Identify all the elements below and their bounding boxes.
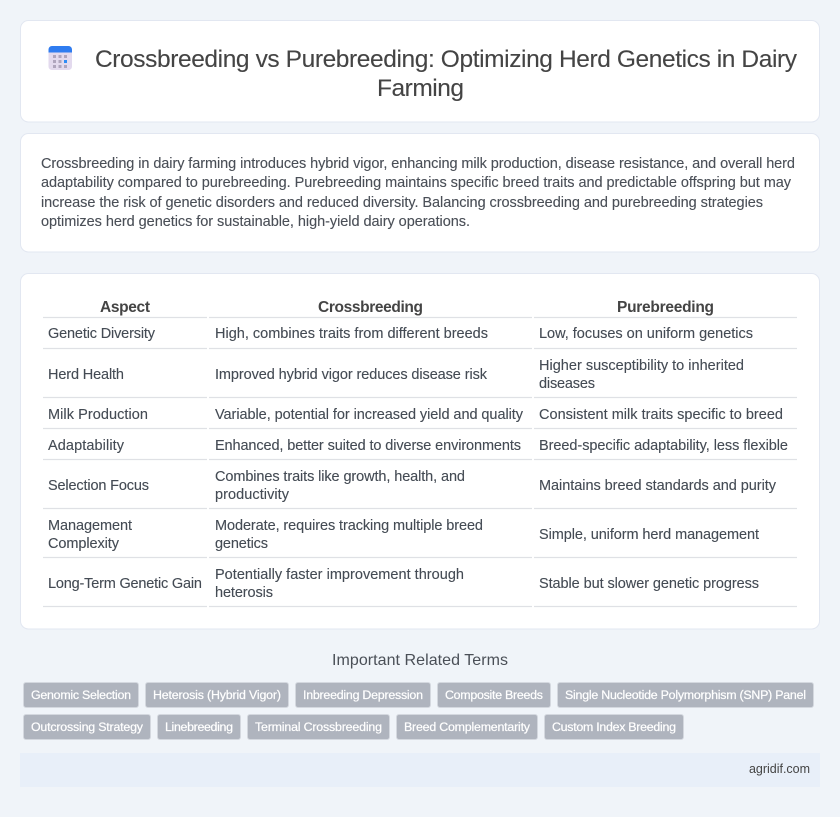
row: management complexity: Simple, uniform herd management bbox=[539, 527, 759, 543]
tag: Inbreeding Depression bbox=[296, 682, 430, 708]
row: management complexity: genetics bbox=[215, 536, 268, 552]
row: long-term genetic gain: Stable but slower genetic progress bbox=[539, 576, 759, 592]
row: management complexity: Moderate, requires tracking multiple breed bbox=[215, 518, 483, 534]
row: herd health: Herd Health bbox=[48, 367, 124, 383]
row: herd health: Improved hybrid vigor reduces disease risk bbox=[215, 367, 488, 383]
footer bbox=[20, 753, 820, 787]
tag: Genomic Selection bbox=[24, 682, 138, 708]
tag: Breed Complementarity: Breed Complementarity bbox=[404, 720, 531, 734]
row: adaptability: Adaptability bbox=[48, 438, 125, 454]
row: herd health: Higher susceptibility to inherited bbox=[539, 358, 744, 374]
icon: calendar bbox=[48, 46, 72, 70]
title: Crossbreeding vs Purebreeding: Optimizing Herd Genetics in Dairy bbox=[95, 46, 798, 73]
row: long-term genetic gain: heterosis bbox=[215, 585, 273, 601]
row: management complexity: Complexity bbox=[48, 536, 120, 552]
row: long-term genetic gain: Potentially faster improvement through bbox=[215, 567, 464, 583]
tag: Outcrossing Strategy: Outcrossing Strategy bbox=[31, 720, 144, 734]
table row lines bbox=[43, 318, 797, 606]
panel: comparison table bbox=[20, 274, 820, 629]
tag: Genomic Selection: Genomic Selection bbox=[31, 688, 131, 702]
title bbox=[95, 46, 798, 102]
related terms heading: Important Related Terms bbox=[332, 652, 508, 669]
row: milk production: Milk Production bbox=[48, 407, 148, 423]
tag: Heterosis: Heterosis (Hybrid Vigor) bbox=[153, 688, 281, 702]
row: genetic diversity: High, combines traits from different breeds bbox=[215, 326, 488, 342]
tag: Terminal Crossbreeding bbox=[248, 714, 390, 740]
description text bbox=[41, 156, 795, 230]
row: herd health: diseases bbox=[539, 376, 595, 392]
row: genetic diversity bbox=[48, 326, 753, 342]
tag: Linebreeding: Linebreeding bbox=[165, 720, 233, 734]
description text: Crossbreeding in dairy farming introduces hybrid vigor, enhancing milk production, disease resistance, and overall herd bbox=[41, 156, 795, 172]
row: milk production bbox=[48, 407, 783, 423]
row: milk production: Variable, potential for increased yield and quality bbox=[215, 407, 524, 423]
row: genetic diversity: Genetic Diversity bbox=[48, 326, 156, 342]
table header: Aspect bbox=[100, 299, 150, 316]
table header: Purebreeding bbox=[617, 299, 714, 316]
row: selection focus: productivity bbox=[215, 487, 290, 503]
tag: SNP Panel: Single Nucleotide Polymorphism (SNP) Panel bbox=[565, 688, 806, 702]
tag: Inbreeding Depression: Inbreeding Depression bbox=[303, 688, 423, 702]
description text: increase the risk of genetic disorders and reduced diversity. Balancing crossbreeding and purebreeding strategies bbox=[41, 195, 763, 211]
row: milk production: Consistent milk traits specific to breed bbox=[539, 407, 783, 423]
tag: Custom Index Breeding: Custom Index Breeding bbox=[552, 720, 676, 734]
tag: Heterosis bbox=[146, 682, 288, 708]
description text: optimizes herd genetics for sustainable, high-yield dairy operations. bbox=[41, 214, 470, 230]
tag: Composite Breeds: Composite Breeds bbox=[445, 688, 543, 702]
row: genetic diversity: Low, focuses on uniform genetics bbox=[539, 326, 753, 342]
row: selection focus: Combines traits like growth, health, and bbox=[215, 469, 465, 485]
tag: Custom Index Breeding bbox=[544, 714, 684, 740]
description text: adaptability compared to purebreeding. Purebreeding maintains specific breed traits and predictable offspring but may bbox=[41, 175, 792, 191]
panel: header bbox=[20, 20, 820, 122]
row: herd health bbox=[48, 358, 744, 392]
panel: description bbox=[20, 134, 820, 252]
tag: SNP Panel bbox=[558, 682, 814, 708]
row: management complexity bbox=[48, 518, 759, 552]
table header bbox=[100, 299, 714, 316]
row: long-term genetic gain: Long-Term Genetic Gain bbox=[48, 576, 202, 592]
tag: Linebreeding bbox=[158, 714, 240, 740]
tag: Composite Breeds bbox=[438, 682, 550, 708]
row: selection focus: Selection Focus bbox=[48, 478, 149, 494]
row: selection focus bbox=[48, 469, 777, 503]
related term tags bbox=[24, 682, 814, 740]
row: long-term genetic gain bbox=[48, 567, 759, 601]
tag: Breed Complementarity bbox=[396, 714, 538, 740]
row: management complexity: Management bbox=[48, 518, 132, 534]
footer: agridif.com bbox=[749, 762, 810, 776]
title: Farming bbox=[377, 75, 464, 102]
row: adaptability: Enhanced, better suited to diverse environments bbox=[215, 438, 521, 454]
tag: Outcrossing Strategy bbox=[24, 714, 150, 740]
row: selection focus: Maintains breed standards and purity bbox=[539, 478, 777, 494]
tag: Terminal Crossbreeding: Terminal Crossbreeding bbox=[255, 720, 382, 734]
row: adaptability: Breed-specific adaptability, less flexible bbox=[539, 438, 788, 454]
table header: Crossbreeding bbox=[318, 299, 423, 316]
row: adaptability bbox=[48, 438, 788, 454]
